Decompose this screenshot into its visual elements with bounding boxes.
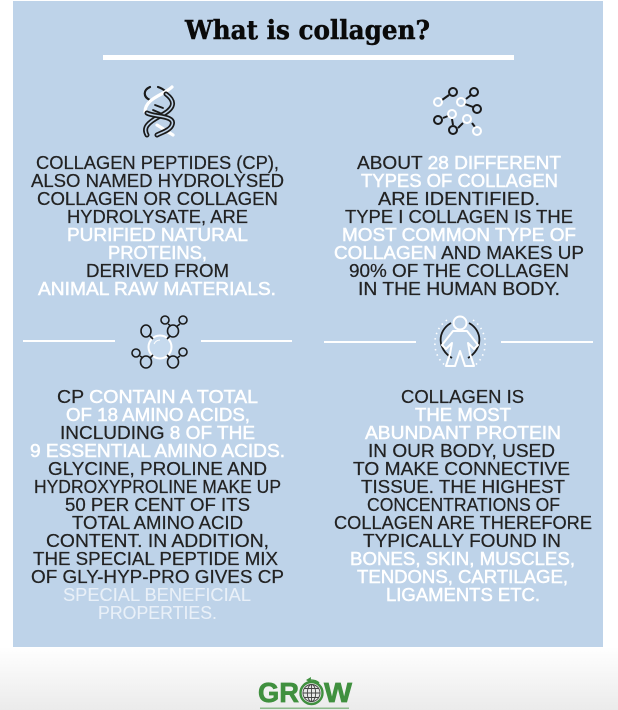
text block: most abundant protein: IN OUR BODY, USED xyxy=(368,440,555,461)
text block: types of collagen: ABOUT 28 DIFFERENT xyxy=(357,152,561,173)
text block: collagen peptides: DERIVED FROM xyxy=(86,260,229,281)
text block: amino acids: GLYCINE, PROLINE AND xyxy=(48,458,267,479)
icon: DNA helix xyxy=(145,87,173,135)
text block: most abundant protein: TO MAKE CONNECTIVE xyxy=(353,458,570,479)
footer background xyxy=(0,647,618,710)
text block: collagen peptides: ALSO NAMED HYDROLYSED xyxy=(31,170,284,191)
text block: most abundant protein: THE MOST xyxy=(415,404,511,425)
text block: amino acids: OF 18 AMINO ACIDS, xyxy=(66,404,250,425)
text block: amino acids: TOTAL AMINO ACID xyxy=(72,512,243,533)
text block: types of collagen: MOST COMMON TYPE OF xyxy=(342,224,576,245)
divider left xyxy=(23,340,292,342)
text block: amino acids: 50 PER CENT OF ITS xyxy=(65,494,250,515)
text block: most abundant protein: TENDONS, CARTILAGE, xyxy=(357,566,568,587)
text block: amino acids: CP CONTAIN A TOTAL xyxy=(57,386,258,407)
logo: GROW: GR xyxy=(258,677,299,708)
divider right xyxy=(324,341,593,343)
text block: amino acids: CONTENT. IN ADDITION, xyxy=(46,530,269,551)
text block: collagen peptides: COLLAGEN OR COLLAGEN xyxy=(37,188,278,209)
text block: amino acids xyxy=(30,386,285,623)
text block: most abundant protein: TISSUE. THE HIGHEST xyxy=(361,476,565,497)
text block: amino acids: SPECIAL BENEFICIAL xyxy=(63,584,251,605)
text block: types of collagen: TYPES OF COLLAGEN xyxy=(361,170,558,191)
text block: collagen peptides xyxy=(31,152,284,299)
text block: types of collagen: ARE IDENTIFIED. xyxy=(378,188,540,209)
text block: most abundant protein: ABUNDANT PROTEIN xyxy=(365,422,561,443)
text block: most abundant protein: TYPICALLY FOUND IN xyxy=(363,530,561,551)
title underline xyxy=(103,55,514,60)
text block: amino acids: OF GLY-HYP-PRO GIVES CP xyxy=(31,566,284,587)
text block: collagen peptides: HYDROLYSATE, ARE xyxy=(67,206,248,227)
text block: amino acids: INCLUDING 8 OF THE xyxy=(60,422,255,443)
logo: GROW: W xyxy=(324,677,353,708)
icon: amino acid cluster xyxy=(132,316,187,368)
icon: human body xyxy=(435,316,485,366)
text block: types of collagen: TYPE I COLLAGEN IS THE xyxy=(345,206,573,227)
text block: collagen peptides: COLLAGEN PEPTIDES (CP), xyxy=(36,152,279,173)
text block: types of collagen xyxy=(334,152,584,299)
text block: amino acids: HYDROXYPROLINE MAKE UP xyxy=(34,476,281,497)
text block: types of collagen: IN THE HUMAN BODY. xyxy=(358,278,560,299)
logo: GROW xyxy=(258,677,353,709)
text block: most abundant protein: LIGAMENTS ETC. xyxy=(386,584,540,605)
text block: most abundant protein: BONES, SKIN, MUSCLES, xyxy=(350,548,575,569)
text block: amino acids: 9 ESSENTIAL AMINO ACIDS. xyxy=(30,440,285,461)
text block: amino acids: PROPERTIES. xyxy=(98,602,217,623)
text block: most abundant protein: CONCENTRATIONS OF xyxy=(367,494,560,515)
text block: collagen peptides: PURIFIED NATURAL xyxy=(67,224,248,245)
text block: most abundant protein: COLLAGEN ARE THEREFORE xyxy=(334,512,592,533)
text block: amino acids: THE SPECIAL PEPTIDE MIX xyxy=(33,548,278,569)
text block: types of collagen: COLLAGEN AND MAKES UP xyxy=(334,242,584,263)
text block: collagen peptides: PROTEINS, xyxy=(108,242,207,263)
text block: most abundant protein: COLLAGEN IS xyxy=(401,386,524,407)
icon: molecule network xyxy=(434,88,481,135)
title: What is collagen? xyxy=(184,16,430,46)
text block: collagen peptides: ANIMAL RAW MATERIALS. xyxy=(38,278,276,299)
text block: most abundant protein xyxy=(334,386,592,605)
text block: types of collagen: 90% OF THE COLLAGEN xyxy=(349,260,569,281)
